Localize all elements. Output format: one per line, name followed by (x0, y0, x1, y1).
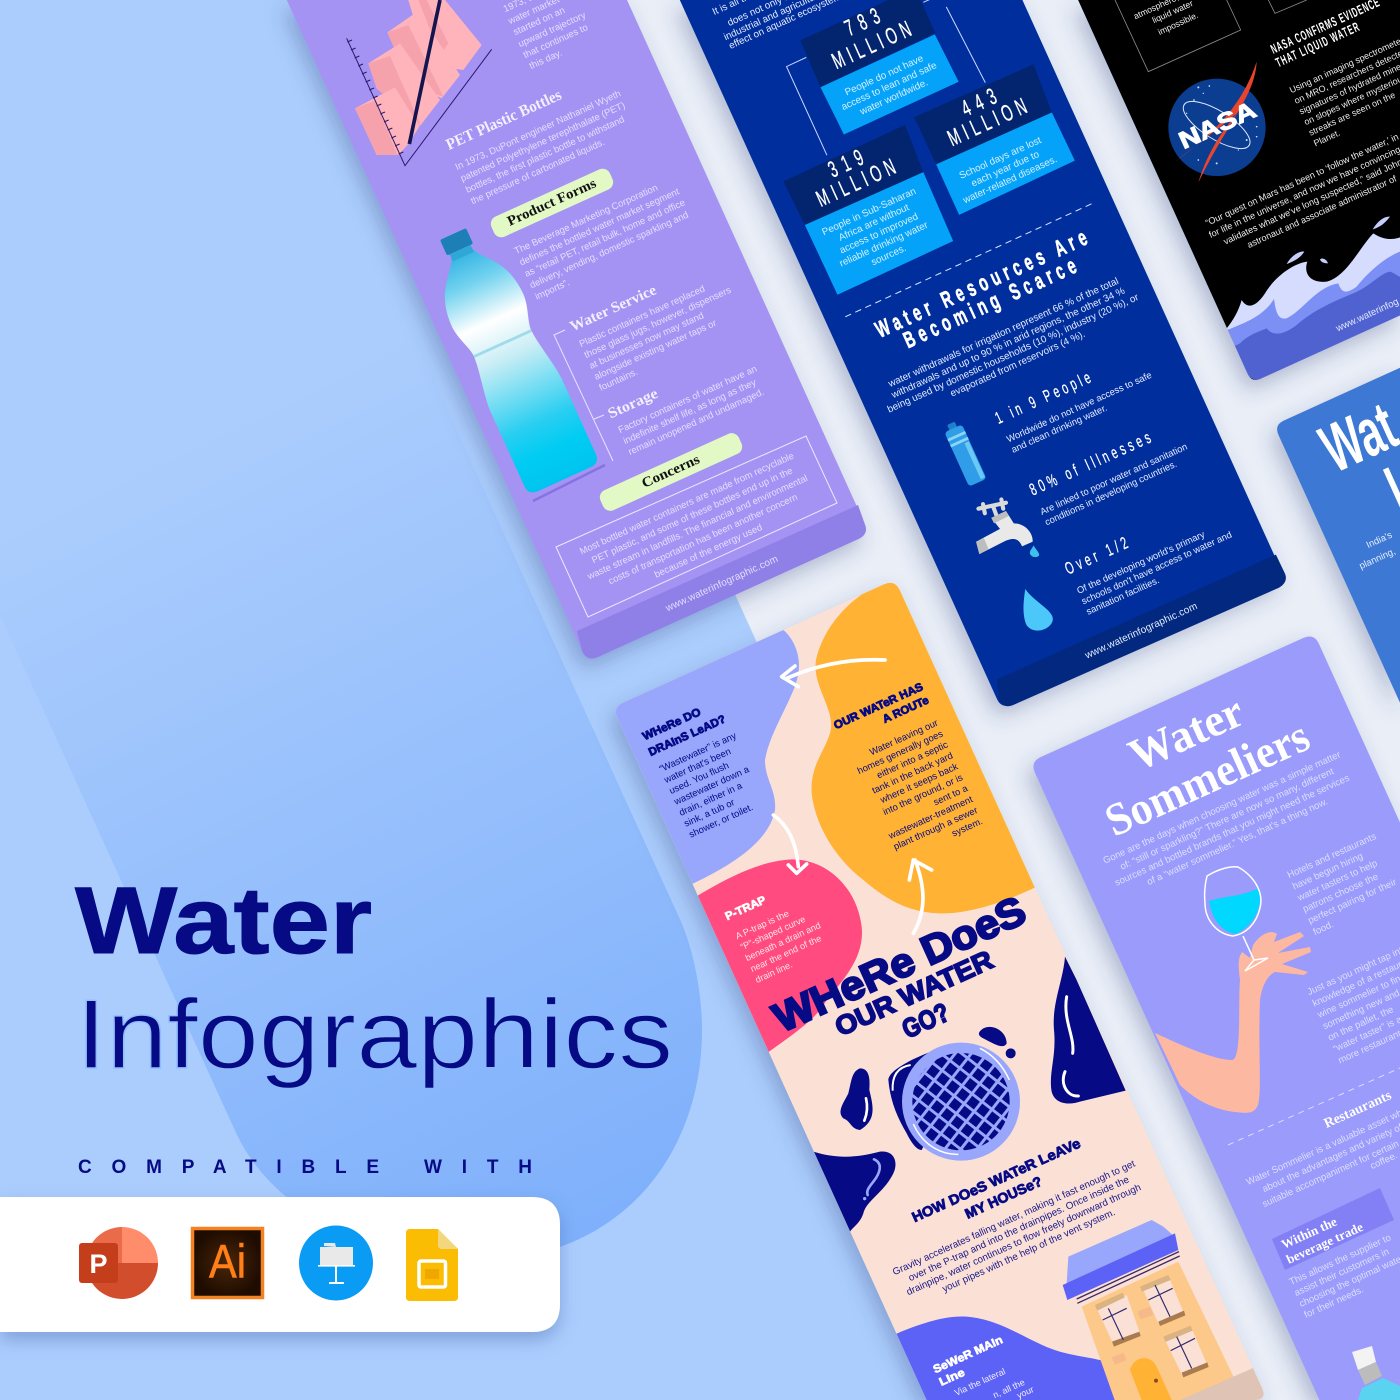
stat: over 1/2: Of the developing world's primary (1075, 528, 1207, 596)
paragraph: restaurants: about the advantages and variety of (1261, 1122, 1400, 1195)
section: p-trap: “P”-shaped curve (739, 914, 807, 952)
paragraph: gravity: drainpipe, water continues to flow freely downward through (905, 1182, 1143, 1298)
stat: 80% of illnesses (1026, 427, 1194, 527)
stat: 80% of illnesses: Are linked to poor water and sanitation (1038, 441, 1189, 517)
footer band (997, 555, 1286, 706)
quote text: validates what we've long suspected,” said John (1222, 157, 1400, 247)
footer band (577, 505, 866, 659)
paragraph: withdrawals: withdrawals and up to 90 % in arid regions, the other 34 % (889, 286, 1127, 401)
illustration: house (1063, 1220, 1270, 1400)
paragraph: imaging spectrometer: Planet. (1312, 128, 1342, 148)
section: Storage: indefinite shelf life, as long as they (622, 377, 758, 447)
intro text: planning, (1358, 546, 1397, 572)
NASA logo: NASA (1175, 97, 1260, 155)
heading: how does water leave my house: HOW DOeS WATeR LeAVe (909, 1135, 1083, 1225)
section: our water has a route: sent to a (932, 783, 970, 808)
text: market trajectory (502, 0, 590, 72)
arrows (773, 660, 932, 933)
paragraph: PET: In 1973, DuPont engineer Nathaniel Wyeth (454, 88, 623, 173)
intro paragraph: sources and bottled brands that you might need the services (1113, 773, 1352, 889)
intro paragraph: of a “water sommelier.” Yes, that's a thing now. (1145, 796, 1330, 888)
icon: Keynote (299, 1226, 373, 1300)
section: where do drains lead: water that's been (662, 746, 733, 786)
stat box: 443 million: School days are lost (958, 135, 1043, 182)
stat box: 319 million: sources. (870, 243, 908, 268)
section: p-trap: near the end of the (749, 933, 823, 974)
blob: drop left (841, 1068, 873, 1130)
paragraph: concerns: because of the energy used (653, 522, 764, 581)
section: Water Service: Water Service (568, 282, 659, 335)
pill: Product Forms (488, 166, 616, 240)
title: Water Infographics: Water (75, 868, 372, 974)
title: where does our water go: WHeRe DoeS (766, 887, 1033, 1041)
side text: hotels: food. (1312, 919, 1336, 938)
stat: 1 in 9 people: Worldwide do not have access to safe (1005, 369, 1153, 444)
section: Water Service (568, 274, 748, 394)
icon: faucet (976, 500, 1039, 557)
text: market trajectory: that continues to (522, 22, 590, 61)
blob: sewer main line: Via the lateral (953, 1366, 1007, 1398)
section: p-trap (724, 894, 832, 985)
paragraph: withdrawals: evaporated from reservoirs (4 %). (949, 329, 1087, 400)
blob: bottom left (807, 1152, 895, 1232)
heading: Water Resources Are Becoming Scarce: Water Resources Are (872, 226, 1091, 344)
section: Storage: Storage (606, 386, 661, 422)
section: where do drains lead (641, 706, 768, 841)
stat: 80% of illnesses: 80% of Illnesses (1026, 427, 1154, 499)
paragraph: restaurants: coffee. (1369, 1150, 1399, 1172)
text: market trajectory: this day. (528, 48, 564, 72)
side text: wine sommelier: something new and (1321, 988, 1400, 1032)
side text: hotels: perfect pairing for their (1306, 877, 1399, 927)
section: where do drains lead: used. You flush (668, 760, 731, 797)
stat box: 783 million: water worldwide. (858, 77, 930, 118)
section: our water has a route: either into a septic (875, 739, 950, 781)
side text: wine sommelier: on the pallet, the (1326, 1004, 1396, 1044)
icon: bottle (942, 419, 987, 487)
callout: within the beverage trade (1272, 1188, 1394, 1270)
boxed text (1115, 0, 1307, 72)
stat box: 443 million: 443 (958, 84, 1001, 122)
section: our water has a route: tank in the back yard (871, 750, 955, 797)
icon: Illustrator (192, 1228, 262, 1298)
illustration: plastic bottle (417, 218, 605, 501)
blob: sewer main line: n, all the (991, 1377, 1026, 1400)
section: Water Service: alongside existing water taps or (593, 318, 718, 383)
stat: over 1/2 (1062, 518, 1238, 617)
paragraph: imaging spectrometer (1288, 34, 1400, 148)
section: our water has a route: A ROUTe (881, 695, 931, 726)
side text: hotels: have begun hiring (1291, 851, 1365, 892)
panel: software icons (0, 1197, 560, 1332)
text: market trajectory: started on an (512, 5, 567, 38)
paragraph: product forms: defines the bottled water market segment (518, 186, 681, 268)
stat box: 319 million (783, 125, 953, 295)
website: www.waterinfog (1333, 296, 1400, 335)
paragraph: supplier: This allows the supplier to (1288, 1232, 1393, 1288)
title: where does our water go: GO? (897, 997, 954, 1044)
lower illustrations and text (807, 957, 1270, 1400)
NASA logo (1168, 62, 1266, 183)
pill: Concerns: Concerns (640, 452, 703, 492)
section: where do drains lead: DRAInS LeAD? (647, 713, 728, 759)
section: our water has a route (832, 681, 985, 864)
text: market trajectory: upward trajectory (517, 10, 588, 50)
icon: Google Slides (406, 1229, 458, 1301)
paragraph: product forms: imports”. (533, 277, 572, 303)
blob: sewer main line: LIne (938, 1367, 967, 1389)
heading: how does water leave my house: MY HOUSe? (962, 1173, 1044, 1222)
boxed text: impossible. (1156, 10, 1200, 37)
section: where do drains lead: sink, a tub or (683, 797, 737, 830)
website: www.waterinfographic.com (663, 554, 780, 615)
stat box: 783 million (800, 0, 959, 135)
intro paragraph: of: “still or sparkling?” There are now so many, different (1119, 766, 1336, 873)
stat box: 443 million: water-related diseases. (961, 154, 1059, 207)
paragraph: imaging spectrometer: streaks are seen on the (1307, 90, 1397, 138)
paragraph: concerns: waste stream in landfills. The financial and environmental (585, 473, 810, 583)
section: our water has a route: plant through a sewer (892, 805, 980, 853)
icon: water drop (1024, 589, 1053, 631)
heading: PET Plastic Bottles: PET Plastic Bottles (443, 87, 564, 154)
paragraph: product forms: The Beverage Marketing Corporation (513, 182, 660, 257)
section: our water has a route: where it seeps back (878, 761, 960, 806)
section: Storage: remain unopened and undamaged. (627, 387, 766, 458)
paragraph: PET: bottles, the first plastic bottle to withstand (464, 114, 626, 196)
paragraph: restaurants: suitable accompaniment for certain (1261, 1139, 1400, 1210)
icon: PowerPoint: P (89, 1249, 108, 1279)
title: Water Infographics: Infographics (76, 979, 673, 1089)
stat box: 319 million: Africa are without (837, 202, 911, 244)
section: our water has a route: system. (950, 816, 985, 840)
section: our water has a route: Water leaving our (868, 718, 940, 758)
stat: 80% of illnesses: conditions in developing countries. (1043, 458, 1178, 527)
waves (1227, 216, 1400, 380)
stat box: 783 million: access to lean and safe (840, 60, 939, 113)
stat: over 1/2: Over 1/2 (1062, 533, 1131, 578)
paragraph: gravity: over the P-trap and into the drainpipes. Once inside the (907, 1174, 1131, 1284)
icon: PowerPoint (79, 1227, 158, 1299)
section: Water Service: those glass jugs, however, dispensers (583, 285, 733, 361)
section: p-trap: P-TRAP (724, 894, 768, 923)
section: where do drains lead: wastewater down a (672, 764, 752, 808)
icon: manhole (888, 1027, 1020, 1161)
section: Storage: Factory containers of water have an (617, 364, 759, 436)
heading: NASA confirms: THAT LIQUID WATER (1274, 20, 1362, 71)
blobs (603, 570, 1040, 1053)
stat box: 783 million: MILLION (828, 17, 915, 75)
section: Water Service: fountains. (598, 367, 640, 394)
quote text: astronaut and associate administrator of (1246, 173, 1398, 250)
stat box: 783 million: People do not have (843, 53, 926, 98)
section: where do drains lead: shower, or toilet. (687, 802, 755, 841)
section: p-trap: beneath a drain and (744, 920, 822, 963)
callout: within the beverage trade: Within the (1279, 1214, 1339, 1252)
paragraph: withdrawals: being used by domestic households (10 %), industry (20 %), or (886, 292, 1141, 415)
side text: wine sommelier (1305, 940, 1400, 1067)
panel: black card NASA (1078, 0, 1400, 387)
stat box: 319 million: MILLION (813, 155, 900, 213)
paragraph: concerns (574, 449, 820, 606)
paragraph: PET: patented Polyethylene terephthalate (PET) (459, 100, 627, 184)
paragraph: withdrawals: water withdrawals for irrigation represent 66 % of the total (886, 276, 1120, 390)
bracket lines (787, 0, 985, 155)
side text: hotels: water tasters to help (1295, 858, 1379, 904)
stat box: 443 million (914, 64, 1075, 215)
icon: bottle (1352, 1346, 1400, 1400)
intro paragraph: Gone are the days when choosing water was a simple matter (1101, 749, 1343, 867)
pill: Concerns (597, 431, 745, 513)
heading: Water Sommeliers: Water (1121, 685, 1251, 781)
paragraph: gravity: Gravity accelerates falling water, making it fast enough to get (891, 1158, 1137, 1278)
stat box: 783 million: 783 (841, 4, 884, 42)
callout: within the beverage trade: beverage trade (1284, 1219, 1366, 1267)
stat box: 319 million: People in Sub-Saharan (820, 186, 918, 238)
label: compatible with: COMPATIBLE WITH (78, 1157, 532, 1178)
illustration: hand holding wine glass (1155, 867, 1311, 1113)
section: where do drains lead: WHeRe DO (641, 706, 703, 743)
title: Water Infographics (75, 868, 673, 1089)
website: www.waterinfographic.com (1083, 601, 1199, 662)
heading: Water Resources Are Becoming Scarce: Becoming Scarce (900, 254, 1081, 354)
stat box: 443 million: MILLION (944, 94, 1031, 152)
section: where do drains lead: drain, either in a (678, 780, 745, 819)
section: p-trap: A P-trap is the (734, 908, 790, 941)
section: Water Service: at businesses now may stand (588, 310, 706, 372)
section: p-trap: drain line. (754, 959, 794, 985)
title: where does our water go: OUR WATER (830, 945, 998, 1042)
paragraph: product forms: as “retail PET, retail bulk, home and office (523, 197, 687, 280)
section: our water has a route: wastewater-treatment (886, 794, 975, 842)
bracket lines (554, 330, 613, 461)
section: Water Service: Plastic containers have replaced (578, 283, 707, 350)
icon: Illustrator: Ai (209, 1234, 246, 1288)
side text: hotels (1285, 831, 1400, 938)
stat box: 443 million: each year due to (970, 149, 1042, 189)
section: where do drains lead: “Wastewater” is any (658, 730, 738, 775)
section: our water has a route: OUR WATeR HAS (832, 681, 926, 732)
box: concerns (556, 436, 837, 617)
heading: Water Sommeliers: Sommeliers (1097, 710, 1317, 846)
panel: navy card Water Resources (680, 0, 1286, 706)
paragraph: gravity: your pipes with the help of the vent system. (941, 1207, 1117, 1295)
heading: Restaurants: Restaurants (1322, 1088, 1394, 1132)
side text: hotels: patrons choose the (1301, 871, 1380, 915)
panel: blue card Water in India (1277, 368, 1400, 703)
paragraph: PET (454, 88, 638, 207)
stat box: 319 million: access to improved (838, 211, 920, 256)
intro text (1358, 530, 1397, 572)
paragraph: product forms: delivery, vending, domestic sparkling and (528, 210, 690, 291)
blob: sewer main line: SeWeR MAIn (932, 1334, 1005, 1376)
stat: over 1/2: schools don't have access to water and (1080, 529, 1233, 606)
stat: 1 in 9 people: 1 in 9 People (992, 367, 1094, 427)
paragraph: concerns: costs of transportation has been another concern (607, 492, 799, 587)
paragraph: supplier: for their needs. (1303, 1284, 1365, 1321)
paragraph: product forms (513, 175, 697, 303)
paragraph: concerns: PET plastic, and some of these bottles end up in the (590, 465, 795, 566)
blob: top right (1051, 957, 1126, 1104)
chart: isometric bars (347, 0, 492, 166)
section: our water has a route: into the ground, or is (881, 772, 965, 818)
paragraph: supplier: assist their customers in (1293, 1246, 1391, 1299)
panel: periwinkle card Water Sommeliers (1033, 636, 1400, 1400)
stat box: 319 million: 319 (825, 145, 868, 183)
paragraph: supplier (1288, 1231, 1400, 1321)
stat: 1 in 9 people: and clean drinking water. (1009, 402, 1109, 455)
side text: hotels: Hotels and restaurants (1286, 831, 1378, 881)
stat box: 319 million: reliable drinking water (838, 220, 931, 270)
panel: peach card where does our water go (603, 570, 1270, 1400)
section: our water has a route: homes generally goes (856, 728, 945, 777)
panel: purple card bottled water (287, 0, 866, 659)
paragraph: concerns: Most bottled water containers are made from recyclable (578, 451, 796, 557)
stat: over 1/2: sanitation facilities. (1084, 574, 1161, 617)
intro text: India's (1365, 530, 1394, 551)
pill: Product Forms: Product Forms (505, 176, 599, 230)
paragraph: PET: the pressure of carbonated liquids. (469, 137, 607, 207)
section: Storage (606, 364, 769, 458)
blob: sewer main line (893, 1316, 1133, 1400)
